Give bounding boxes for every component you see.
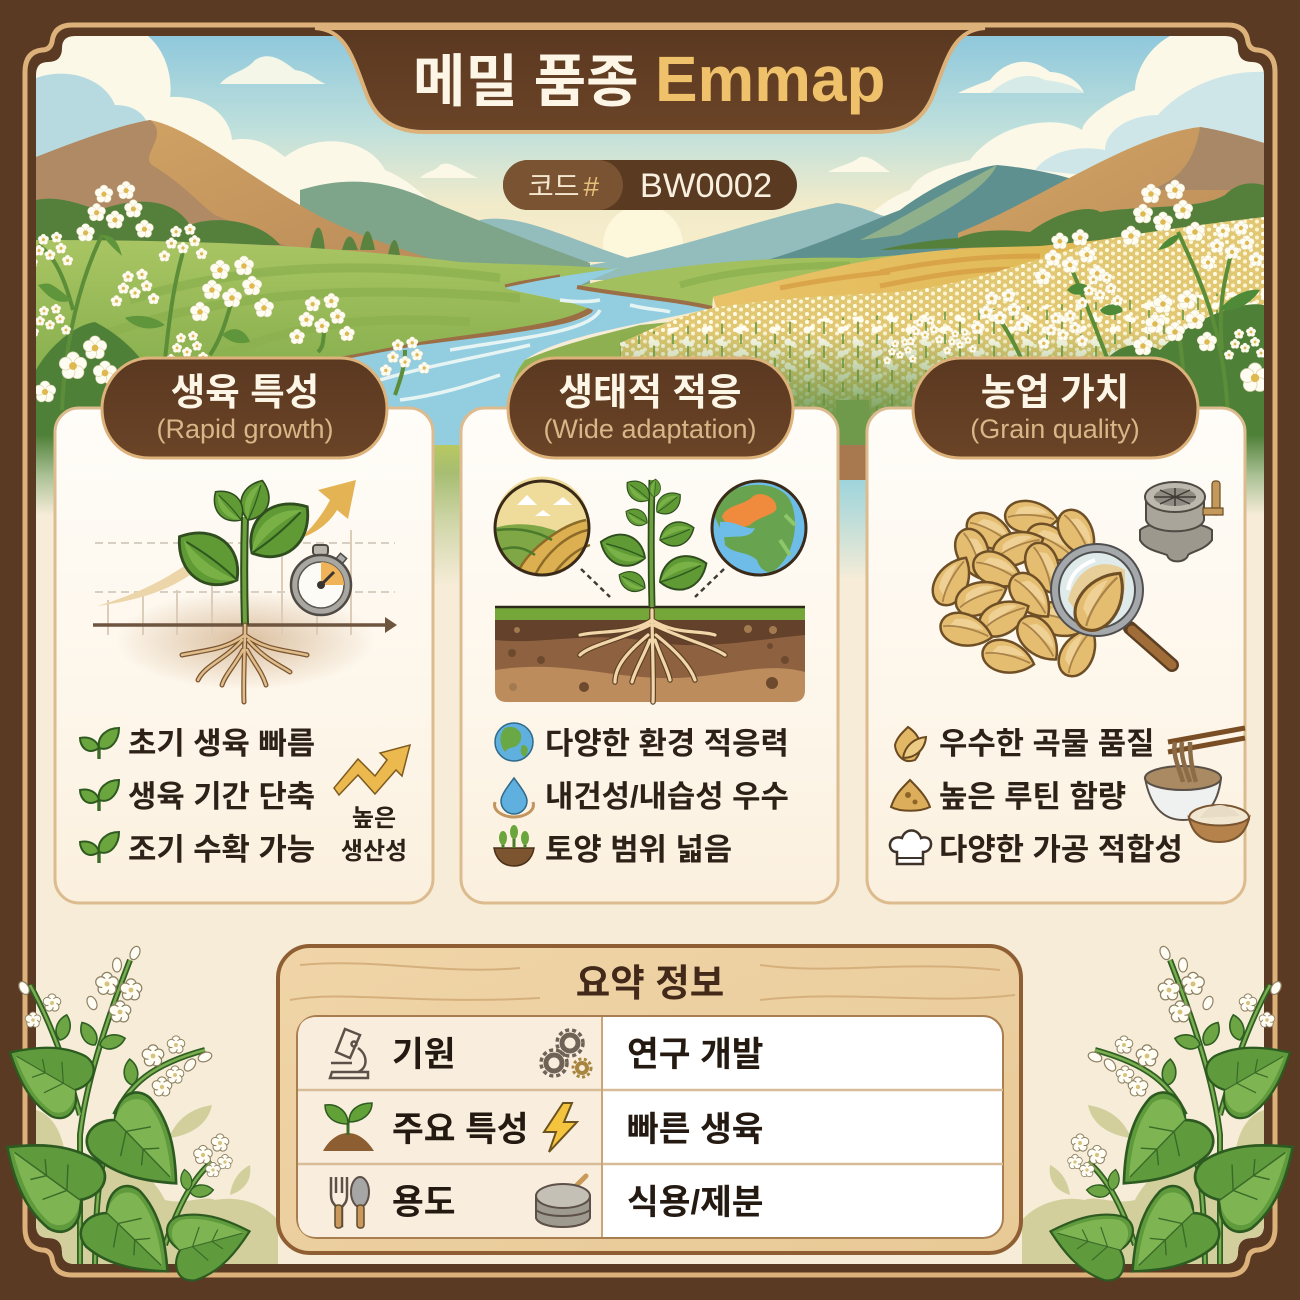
panel: growth traits [55, 408, 433, 903]
table [297, 1016, 1003, 1238]
row: origin [330, 1029, 764, 1078]
icon: fork and spoon [331, 1177, 369, 1228]
callout: high productivity: 생산성 [341, 838, 407, 865]
heading: ecological adaptation: 생태적 적응 [559, 371, 741, 413]
list: ecological adaptation: 토양 범위 넓음 [545, 832, 732, 867]
illustration: soil and plant [495, 475, 806, 702]
callout: high productivity: 높은 [352, 805, 396, 832]
icon: water drop [495, 778, 533, 817]
list: agricultural value: 다양한 가공 적합성 [939, 832, 1183, 867]
row: key traits [323, 1103, 764, 1152]
row: use [331, 1176, 764, 1228]
heading: summary: 요약 정보 [576, 962, 724, 1004]
title banner [315, 28, 985, 132]
heading: agricultural value: (Grain quality) [970, 414, 1140, 444]
panel: ecological adaptation [461, 408, 838, 903]
plant: bottom left [0, 945, 278, 1299]
title: 메밀 품종 [413, 50, 639, 114]
list: growth traits [80, 726, 315, 867]
icon: microscope [330, 1029, 368, 1078]
illustration: plant growth chart [93, 476, 397, 702]
list: agricultural value: 우수한 곡물 품질 [939, 726, 1154, 761]
heading: agricultural value [913, 358, 1198, 458]
list: growth traits: 초기 생육 빠름 [128, 726, 315, 761]
icon: chef hat [890, 830, 931, 864]
code pill: BW0002 [640, 167, 772, 205]
code pill: 코드# [528, 171, 600, 202]
list: ecological adaptation: 내건성/내습성 우수 [545, 779, 789, 814]
icon: gears [541, 1030, 591, 1077]
heading: growth traits: (Rapid growth) [156, 414, 334, 444]
row: use: 용도 [392, 1184, 455, 1222]
flowers right [883, 180, 1270, 420]
row: key traits: 주요 특성 [392, 1111, 529, 1149]
icon: grain pile [891, 780, 930, 811]
heading: growth traits [102, 358, 387, 458]
list: growth traits: 조기 수확 가능 [128, 832, 315, 867]
icon: noodles and flour [1145, 728, 1249, 842]
illustration: grains with magnifier [926, 481, 1223, 683]
list: agricultural value [890, 726, 1249, 867]
heading: ecological adaptation: (Wide adaptation) [543, 414, 757, 444]
callout: high productivity [334, 745, 410, 865]
row: key traits: 빠른 생육 [627, 1111, 764, 1149]
icon: lightning [544, 1103, 577, 1152]
icon: grain [895, 727, 926, 761]
icon: millstone [536, 1176, 590, 1227]
row: origin: 기원 [392, 1036, 455, 1074]
title: Emmap [655, 43, 885, 115]
heading: ecological adaptation [508, 358, 793, 458]
list: growth traits: 생육 기간 단축 [128, 779, 315, 814]
row: origin: 연구 개발 [627, 1036, 764, 1074]
icon: earth [495, 723, 533, 761]
list: agricultural value: 높은 루틴 함량 [939, 779, 1126, 814]
icon: roots [182, 625, 307, 702]
icon: roots [580, 610, 725, 702]
row: use: 식용/제분 [627, 1184, 764, 1222]
heading: growth traits: 생육 특성 [171, 371, 319, 413]
icon: seedling [323, 1103, 374, 1151]
heading: agricultural value: 농업 가치 [981, 371, 1129, 413]
plant: bottom right [1022, 945, 1300, 1299]
icon: globe [712, 481, 806, 575]
list: ecological adaptation [494, 723, 789, 867]
icon: stopwatch [291, 545, 351, 615]
code pill [503, 160, 797, 210]
icon: millstone [1140, 481, 1223, 561]
icon: soil sprouts [494, 825, 534, 866]
panel: summary [278, 946, 1021, 1253]
list: ecological adaptation: 다양한 환경 적응력 [545, 726, 789, 761]
flowers left [27, 181, 430, 410]
panel: agricultural value [867, 408, 1249, 903]
icon: farmland circle [495, 477, 590, 576]
